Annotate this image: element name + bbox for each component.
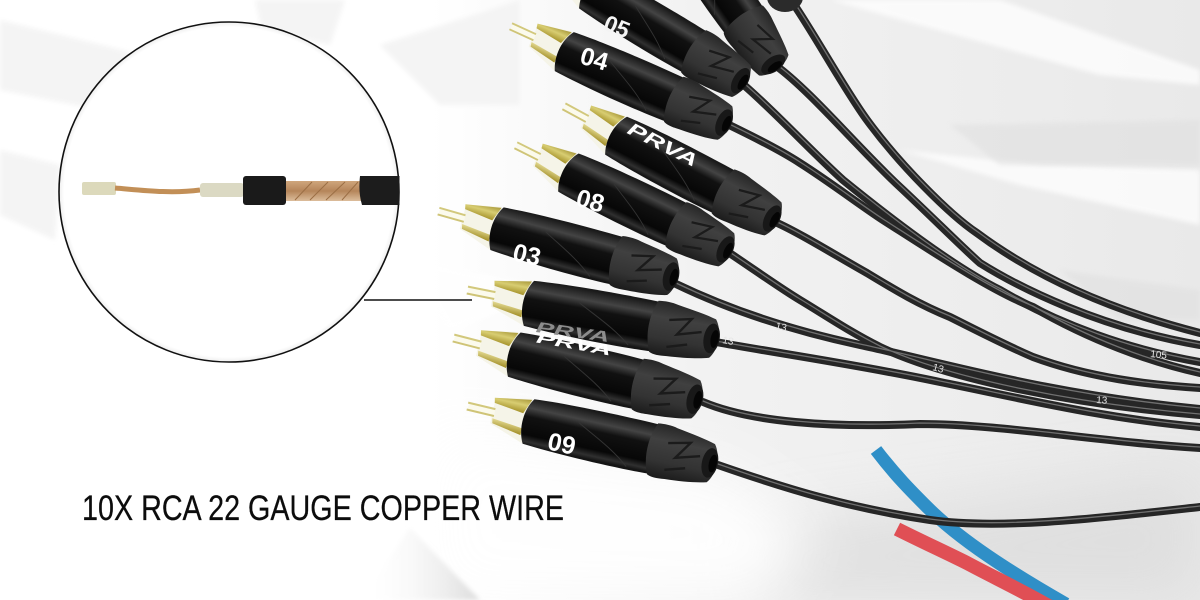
connector 03: [431, 188, 686, 303]
wire tip insulation: [82, 182, 116, 195]
label 09: 09: [545, 428, 578, 461]
leader line: [364, 299, 472, 301]
thin copper strand: [115, 188, 200, 192]
PRVA reflection: PRVA: [535, 319, 610, 346]
connector PRVA upper: [551, 86, 791, 244]
label 08: 08: [573, 184, 608, 219]
connector: top partial: [767, 0, 803, 12]
blue wire: [876, 450, 1066, 600]
connector blank: [462, 266, 725, 366]
cables: [676, 2, 1200, 524]
cable print labels: 13: [1096, 395, 1108, 407]
magnifier circle: [59, 22, 400, 362]
connector 04: [500, 5, 742, 148]
red wire: [897, 529, 1052, 600]
white insulation: [200, 183, 244, 197]
label 03: 03: [510, 238, 543, 272]
black outer jacket: [359, 176, 400, 205]
cable print labels: 13: [721, 335, 735, 348]
caption: 10X RCA 22 GAUGE COPPER WIRE: [82, 489, 564, 528]
cable print labels: [721, 321, 1168, 407]
cable print labels: 13: [774, 321, 788, 334]
cable highlights: [676, 2, 1200, 523]
label 04: 04: [577, 42, 612, 77]
PRVA logo upper: PRVA: [624, 118, 701, 171]
stripped wire detail: [82, 176, 400, 205]
connector: unnumbered top: [622, 0, 799, 84]
connector 08: [504, 124, 744, 275]
connector PRVA lower: [447, 314, 709, 426]
PRVA logo lower: PRVA: [535, 330, 613, 360]
black sleeve: [243, 176, 286, 205]
cable print labels: 105: [1150, 349, 1168, 362]
connector 05: [527, 0, 761, 106]
connector 09: [461, 382, 724, 490]
cable print labels: 13: [931, 362, 945, 376]
label 05: 05: [600, 10, 634, 44]
copper braid: [284, 181, 362, 201]
cable bundle strokes: [676, 3, 1200, 524]
